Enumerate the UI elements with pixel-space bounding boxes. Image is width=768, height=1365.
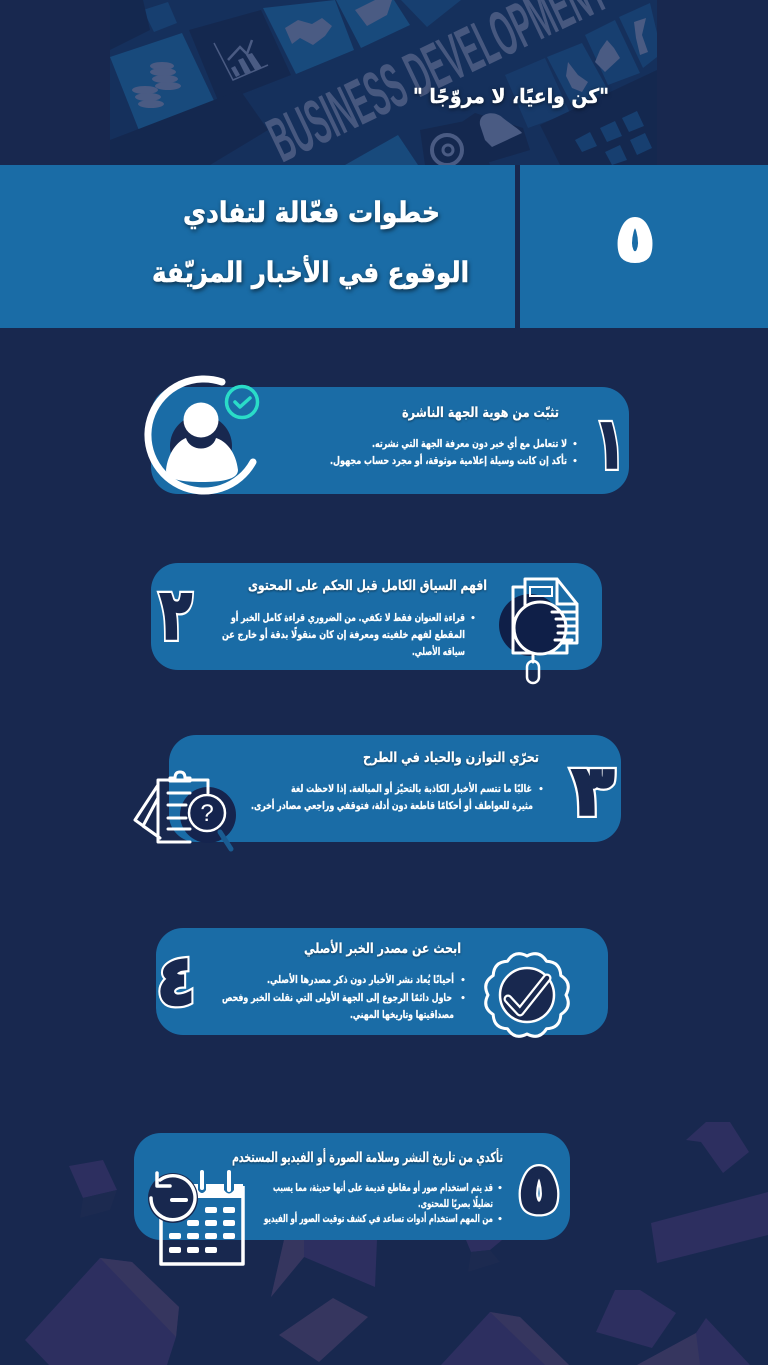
step 2 bullets: سياقه الأصلي.: [412, 645, 465, 658]
step 3 bullets: غالبًا ما تتسم الأخبار الكاذبة بالتحيّز أو المبالغة. إذا لاحظت لغة: [291, 781, 532, 795]
step 5 bullets: تضليلًا بصريًا للمحتوى.: [418, 1196, 493, 1210]
icon: target: [432, 135, 462, 165]
icon: document magnifier: [499, 579, 577, 683]
step 2 bullets: المقطع لفهم خلفيته ومعرفة إن كان منقولًا بدقة أو خارج عن: [222, 627, 465, 641]
step 4 heading: ابحث عن مصدر الخبر الأصلي: [304, 940, 461, 957]
step 2 bullets: [222, 610, 476, 658]
step 5 bullets: قد يتم استخدام صور أو مقاطع قديمة على أنها حديثة، مما يسبب: [273, 1180, 493, 1194]
step 2 number: ٢: [160, 576, 192, 655]
step 1 number: ١: [595, 404, 625, 483]
step 1 card: [148, 379, 629, 494]
step 5 bullets: •: [497, 1184, 503, 1194]
background cubes: [25, 1122, 768, 1365]
step 1 bullets: [330, 436, 578, 467]
icon: pin map: [595, 40, 620, 72]
icon: coins: [132, 62, 181, 108]
step 3 card: [135, 735, 621, 849]
step 2 number: ٢: [160, 576, 192, 655]
step 4 bullets: [222, 972, 466, 1021]
quote: "كن واعيًا، لا مروّجًا ": [413, 84, 609, 108]
step 3 number: ٣: [572, 752, 614, 831]
step 4 number: ٤: [157, 942, 195, 1021]
step 4 bullets: مصداقيتها وتاريخها المهني.: [350, 1009, 454, 1021]
step 1 bullets: لا تتعامل مع أي خبر دون معرفة الجهة التي نشرته.: [372, 436, 567, 450]
icon: verified badge: [486, 954, 568, 1036]
icon: puzzle: [566, 62, 588, 92]
step 5 bullets: [263, 1180, 503, 1225]
step 2 card: [151, 563, 602, 683]
icon: clipboard question: [135, 772, 236, 849]
title: الوقوع في الأخبار المزيّفة: [152, 255, 469, 289]
icon: handshake: [285, 18, 332, 45]
icon: bar chart: [214, 40, 268, 80]
header band: title panel: [0, 165, 515, 328]
step 5 number: ٥: [518, 1150, 560, 1229]
step 4 card: [156, 928, 608, 1036]
step 5 heading: تأكدي من تاريخ النشر وسلامة الصورة أو الفيديو المستخدم: [232, 1148, 503, 1167]
step 4 bullets: •: [460, 976, 466, 986]
step 2 bullets: •: [470, 614, 476, 624]
step 3 bullets: •: [538, 785, 544, 795]
step 2 heading: افهم السياق الكامل قبل الحكم على المحتوى: [248, 578, 487, 594]
icon: house: [355, 0, 392, 26]
step 1 number: ١: [595, 404, 625, 483]
icon: verified user: [148, 379, 258, 491]
step 3 bullets: [251, 781, 544, 812]
step 4 bullets: حاول دائمًا الرجوع إلى الجهة الأولى التي نقلت الخبر وفحص: [222, 991, 452, 1004]
step 4 number: ٤: [157, 942, 195, 1021]
step 1 bullets: •: [572, 457, 578, 467]
step 5 bullets: من المهم استخدام أدوات تساعد في كشف توقيت الصور أو الفيديو: [263, 1211, 493, 1225]
step 4 bullets: أحيانًا يُعاد نشر الأخبار دون ذكر مصدرها الأصلي.: [267, 972, 454, 986]
icon: calendar with clock: [148, 1172, 243, 1264]
title: [152, 196, 469, 289]
header band: number panel: [520, 165, 768, 328]
step 2 bullets: قراءة العنوان فقط لا تكفي. من الضروري قراءة كامل الخبر أو: [230, 610, 465, 624]
icon: team: [480, 113, 522, 147]
step 5 number: ٥: [518, 1150, 560, 1229]
step 5 card: [134, 1133, 570, 1264]
icon: hourglass: [634, 18, 648, 55]
step 5 bullets: •: [497, 1215, 503, 1225]
step 4 bullets: •: [460, 994, 466, 1004]
header photo: business development keyboard: [110, 0, 657, 176]
step 1 heading: تثبّت من هوية الجهة الناشرة: [402, 405, 559, 421]
step 1 bullets: •: [572, 440, 578, 450]
big number five: ٥: [615, 200, 655, 277]
step 1 bullets: تأكد إن كانت وسيلة إعلامية موثوقة، أو مجرد حساب مجهول.: [330, 453, 567, 467]
step 3 number: ٣: [572, 752, 614, 831]
title: خطوات فعّالة لتفادي: [183, 196, 440, 229]
icon: clipboard question: ?: [200, 800, 214, 827]
step 3 bullets: مثيرة للعواطف أو أحكامًا قاطعة دون أدلة، فتوقفي وراجعي مصادر أخرى.: [251, 798, 533, 812]
step 3 heading: تحرّي التوازن والحياد في الطرح: [363, 750, 539, 767]
